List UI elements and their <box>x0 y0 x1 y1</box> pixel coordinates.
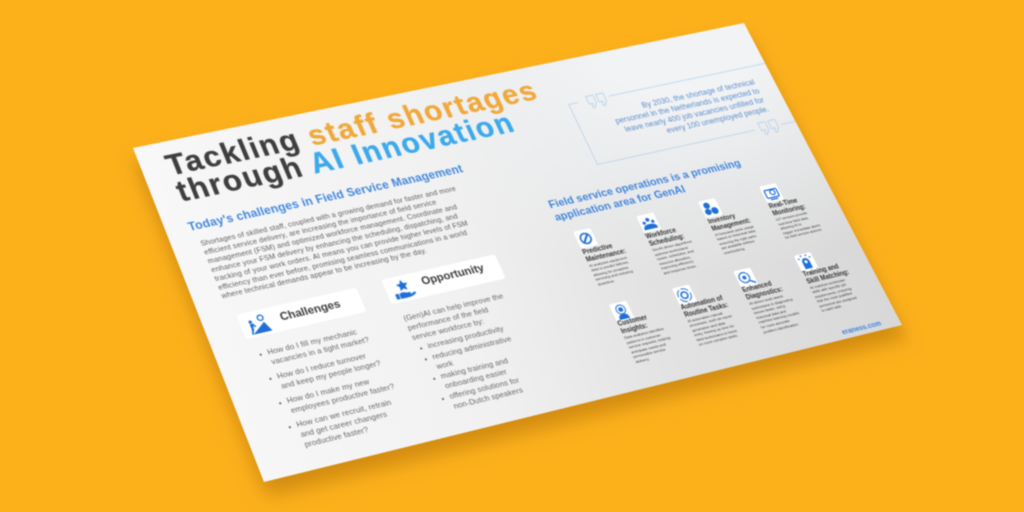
card: workforce scheduling <box>636 212 698 276</box>
card: real-time monitoring: Monitoring: <box>771 204 807 217</box>
card: inventory management: AI forecasts parts usage <box>714 225 755 237</box>
list: opportunity actions: offering solutions for <box>448 376 521 401</box>
card: customer insights: delivery. <box>635 357 651 365</box>
list: challenges questions: and get career changers <box>299 410 389 439</box>
card: workforce scheduling: and response times. <box>663 264 698 276</box>
card: predictive maintenance: downtime. <box>597 279 616 287</box>
card: predictive maintenance: Predictive <box>581 243 614 256</box>
card: enhanced diagnostics: historical data and <box>756 310 787 320</box>
callout: quote box <box>568 62 796 166</box>
card: customer insights: anticipate needs and <box>631 343 667 355</box>
text block: introduction: efficiency than ever before, promising seamless communications in a world <box>217 229 468 292</box>
card: customer insights: personalize service <box>633 348 667 360</box>
card: real-time monitoring: allowing AI to <box>780 223 803 231</box>
card: automation of routine tasks: on more complex tasks. <box>698 334 739 347</box>
card: inventory management <box>698 198 757 256</box>
icon: magnifier <box>733 267 759 288</box>
text block: introduction: enhance your FSM delivery by enhancing the scheduling, dispatching, and <box>210 212 459 274</box>
icon: wrench circle <box>573 228 598 249</box>
text block: introduction <box>199 185 469 301</box>
card: inventory management: Management: <box>710 217 752 232</box>
card: predictive maintenance: allowing for proactive <box>593 266 629 278</box>
card: workforce scheduling: GenAI-driven algorithms <box>652 240 693 253</box>
card: automation of routine tasks: Routine Tasks: <box>683 301 730 319</box>
card: training and skill matching <box>794 252 858 313</box>
card: real-time monitoring <box>760 183 823 240</box>
heading: opportunity: Opportunity <box>419 261 486 287</box>
icon: person with target <box>609 301 634 322</box>
icon: person climbing mountain <box>248 314 273 336</box>
text block: introduction: efficient service delivery, are increasing the importance of field service <box>203 199 438 257</box>
text block: quote: leave nearly 400 job vacancies unfilled for <box>623 96 766 134</box>
list: challenges questions: employees productive faster? <box>289 382 396 415</box>
card: predictive maintenance: data to predict failures, <box>591 261 630 273</box>
card: automation of routine tasks: field technicians to focus <box>696 329 738 343</box>
card: automation of routine tasks: AI automates manual <box>687 312 723 324</box>
card: customer insights: Customer <box>616 314 649 328</box>
card: training and skill matching: requirements, ensuring <box>814 287 852 299</box>
title: through AI Innovation <box>171 106 520 208</box>
icon: head with sparks <box>794 252 819 272</box>
list: opportunity actions: reducing administrative <box>431 335 513 361</box>
heading: field service operations: Field service operations is a promising <box>546 157 743 210</box>
heading: challenges: Challenges <box>278 297 342 323</box>
card: automation of routine tasks: processes, such as report <box>689 314 733 328</box>
panel: opportunity header <box>381 254 506 304</box>
card: training and skill matching: skills with specific job <box>812 283 847 295</box>
card: workforce scheduling: Workforce <box>644 227 678 240</box>
list: challenges questions: How do I reduce turnover <box>276 352 367 381</box>
card: inventory management: Inventory <box>707 213 737 225</box>
card: predictive maintenance: AI analyzes equipment <box>588 256 628 268</box>
text block: introduction: tracking of your work orders. AI means you can provide higher levels of FSM <box>213 219 469 283</box>
card: customer insights: patterns in customer <box>626 333 662 345</box>
card: enhanced diagnostics: machine learning models <box>758 312 800 325</box>
list: challenges questions: How do I fill my mechanic <box>266 328 358 357</box>
list: opportunity actions: increasing productivity <box>426 325 505 350</box>
card: automation of routine tasks: entry, freeing up time for <box>694 325 735 338</box>
list: opportunity actions: work <box>435 359 455 371</box>
text block: opportunity intro: service workforce by: <box>410 318 486 342</box>
card: real-time monitoring: IoT sensors provide <box>775 211 808 222</box>
card: enhanced diagnostics: issues faster, using <box>753 305 786 316</box>
icon: hand holding star <box>394 280 417 300</box>
text block: quote: By 2030, the shortage of technical <box>640 78 756 109</box>
footer: website: eraneos.com <box>840 320 883 336</box>
list: challenges questions: productive faster? <box>303 426 370 449</box>
card: training and skill matching: AI matches technician <box>809 278 846 290</box>
icon: stacked boxes <box>698 198 723 218</box>
heading: field service operations: application area for GenAI <box>552 183 687 223</box>
card: workforce scheduling: improving efficiency <box>661 260 694 271</box>
card: enhanced diagnostics: technicians in diagnosing <box>751 298 793 311</box>
card: enhanced diagnostics: Enhanced <box>741 280 773 294</box>
text block: introduction: Shortages of skilled staff, coupled with a growing demand for faster and more <box>199 185 457 248</box>
icon: quote outline frame <box>568 62 796 166</box>
card: workforce scheduling: routes, schedules, and <box>656 250 695 262</box>
list: opportunity actions: making training and <box>439 357 510 381</box>
list: challenges questions: and keep my people longer? <box>280 359 382 391</box>
card: real-time monitoring: trigger immediate alerts <box>782 224 821 236</box>
card: enhanced diagnostics: Diagnostics: <box>745 286 784 301</box>
icon: team group <box>636 213 661 233</box>
list: challenges questions <box>259 328 396 449</box>
list: opportunity actions: onboarding easier <box>444 368 508 390</box>
card: predictive maintenance: servicing and reducing <box>595 270 634 282</box>
card: automation of routine tasks <box>672 284 739 347</box>
card: real-time monitoring: Real-Time <box>768 197 799 210</box>
title: Tackling staff shortages <box>161 74 543 182</box>
card: real-time monitoring: real-time field data, <box>778 216 810 227</box>
card: inventory management: based on historical data, <box>716 229 757 242</box>
card: enhanced diagnostics: problem identification. <box>763 322 800 335</box>
icon: monitor <box>759 183 784 203</box>
card: predictive maintenance: Maintenance: <box>585 248 627 263</box>
card: predictive maintenance <box>574 228 634 287</box>
card: enhanced diagnostics: for more accurate <box>760 319 791 330</box>
text block: introduction: where technical demands appear to be increasing by the day. <box>220 247 428 301</box>
card: real-time monitoring: for field service actions. <box>785 228 823 240</box>
panel: challenges header <box>236 288 366 339</box>
list: challenges questions: How can we recruit, retrain <box>295 398 393 429</box>
list: opportunity actions: non-Dutch speakers <box>452 386 524 411</box>
text block: opportunity intro: performance of the field <box>406 306 490 332</box>
card: customer insights: service requests, helping <box>628 336 671 350</box>
heading: today's challenges: Today's challenges in Field Service Management <box>186 162 465 233</box>
card: customer insights: Insights: <box>620 322 649 335</box>
card: automation of routine tasks: Automation of <box>679 294 724 311</box>
list: challenges questions: vacancies in a tight market? <box>270 336 371 366</box>
card: workforce scheduling: resource allocation, <box>658 256 692 266</box>
card: inventory management: are available without <box>721 240 755 251</box>
card: inventory management: overstocking. <box>723 247 746 256</box>
card: inventory management: ensuring the right parts <box>719 234 757 246</box>
card: enhanced diagnostics: AI-driven tools assist <box>749 295 784 306</box>
icon: gear cycle <box>672 284 697 306</box>
card: training and skill matching: that the most qualified <box>816 292 853 304</box>
card: training and skill matching: Skill Matching: <box>805 269 851 285</box>
card: training and skill matching: to each task. <box>821 305 843 313</box>
card: training and skill matching: personnel are assigned <box>819 296 858 309</box>
card: workforce scheduling: optimize technicians' <box>654 246 689 257</box>
text block: quote: personnel in the Netherlands is expected to <box>613 87 761 125</box>
list: opportunity actions <box>420 325 524 411</box>
list: challenges questions: How do I make my new <box>285 378 371 405</box>
panel: tilted document page <box>133 23 902 482</box>
text block: introduction: management (FSM) and optimized workforce management. Coordinate and <box>206 203 459 265</box>
card: automation of routine tasks: generation and data <box>691 321 726 333</box>
text block: opportunity intro <box>402 292 505 342</box>
text block: quote <box>613 78 771 135</box>
card: workforce scheduling: Scheduling: <box>648 233 686 248</box>
card: enhanced diagnostics <box>734 268 800 335</box>
text block: quote: every 100 unemployed people. <box>665 105 771 135</box>
card: customer insights: Data analytics identifies <box>624 327 665 340</box>
card: customer insights <box>609 301 671 365</box>
text block: opportunity intro: (Gen)AI can help improve the <box>402 292 505 323</box>
card: training and skill matching: Training and <box>802 263 840 278</box>
